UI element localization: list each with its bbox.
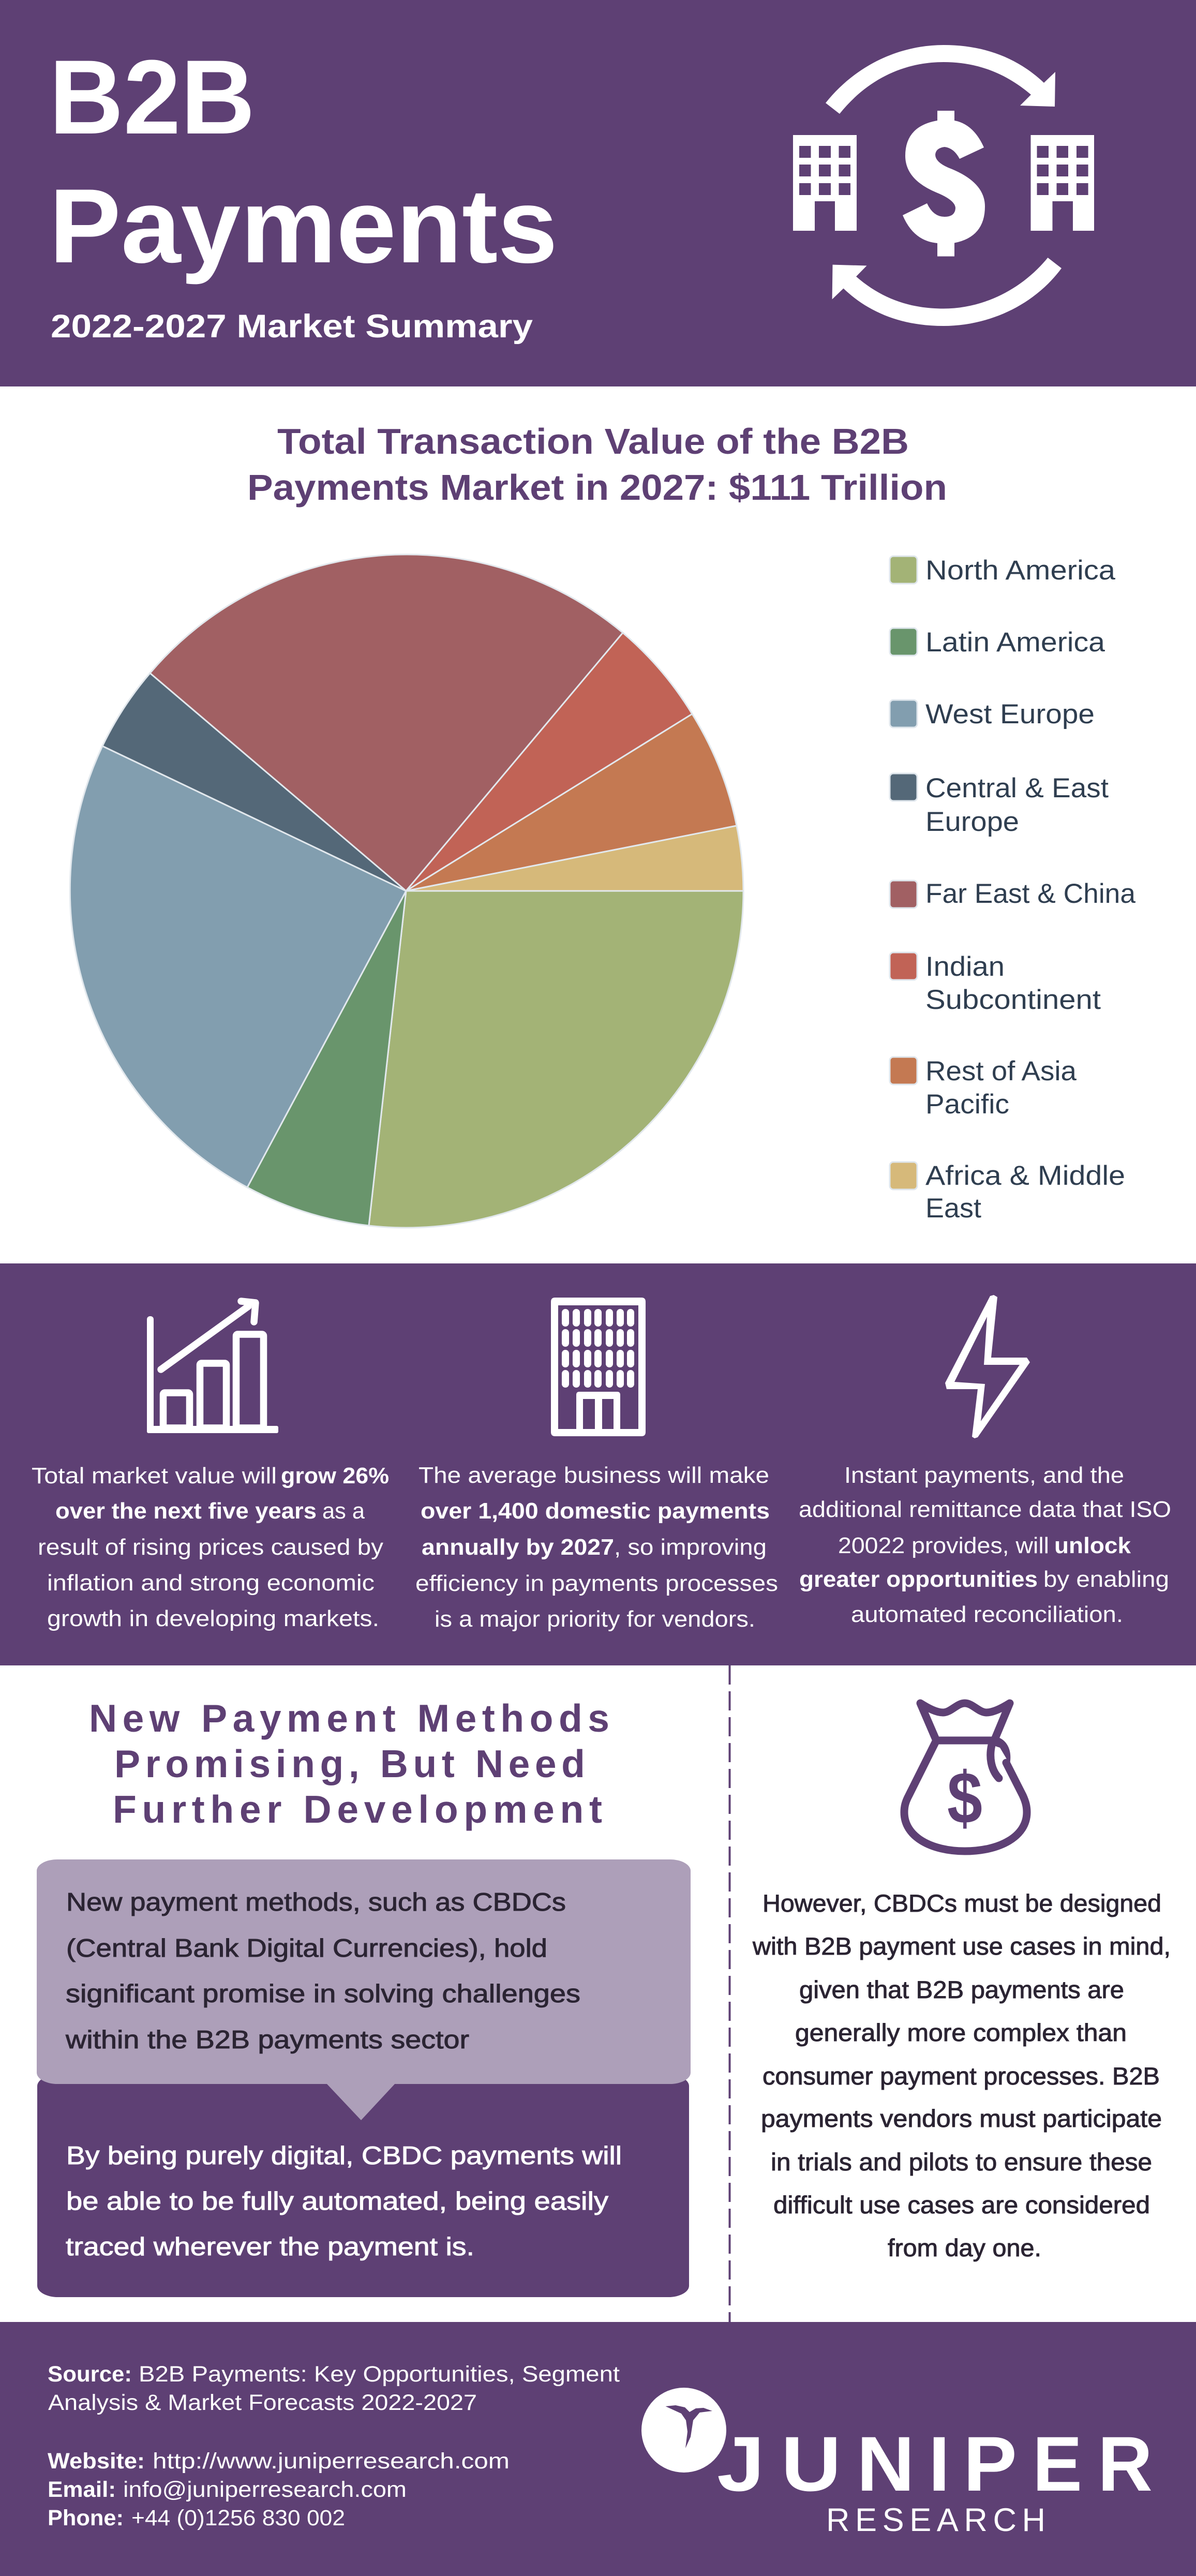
- legend: North America: North America: [925, 555, 1116, 586]
- text: source: B2B Payments: Key Opportunities, Segment: [139, 2362, 620, 2387]
- pie chart: [70, 555, 743, 1228]
- text: CBDC design copy: [752, 1889, 1171, 2261]
- logo wordmark: E: [1033, 2420, 1082, 2507]
- logo mark: [641, 2388, 726, 2473]
- icon: rising bar chart: [147, 1301, 278, 1433]
- legend: Indian Subcontinent: [890, 951, 1101, 1015]
- text: market growth: Total market value will: [32, 1463, 277, 1488]
- text: source: [48, 2362, 620, 2415]
- panel: CBDC design: [752, 1703, 1171, 2261]
- panel: transaction value chart: [70, 421, 1136, 1228]
- section heading: Further Development: [113, 1788, 602, 1831]
- text: market growth: growth in developing markets.: [47, 1606, 379, 1631]
- text: contact details: [48, 2449, 510, 2530]
- title: [49, 38, 558, 285]
- panel: footer: [0, 2322, 1196, 2576]
- logo wordmark: R: [1098, 2420, 1153, 2507]
- text: domestic payments: over 1,400 domestic payments: [421, 1498, 770, 1524]
- legend: Rest of Asia Pacific: [890, 1056, 1077, 1120]
- text: instant payments: [799, 1463, 1171, 1627]
- text: domestic payments: annually by 2027: [422, 1535, 614, 1560]
- legend: Central & East Europe: Central & East: [925, 773, 1109, 803]
- text: light box copy: significant promise in solving challenges: [66, 1980, 580, 2008]
- text: contact details: +44 (0)1256 830 002: [131, 2506, 345, 2530]
- legend: Central & East Europe: Europe: [925, 807, 1019, 837]
- logo wordmark: P: [963, 2420, 1017, 2507]
- text: instant payments: automated reconciliation.: [851, 1602, 1123, 1627]
- text: CBDC design copy: payments vendors must participate: [761, 2105, 1162, 2132]
- text: contact details: Website:: [48, 2449, 145, 2474]
- text: domestic payments: efficiency in payments processes: [415, 1571, 778, 1596]
- text: market growth: grow 26%: [281, 1463, 389, 1488]
- chart heading: Total Transaction Value of the B2B: [277, 421, 909, 461]
- legend: Africa & Middle East: Africa & Middle: [925, 1160, 1125, 1191]
- text: market growth: [32, 1463, 389, 1631]
- text: dark box copy: traced wherever the payment is.: [66, 2233, 474, 2261]
- logo wordmark: J: [717, 2420, 765, 2507]
- logo wordmark: N: [857, 2420, 915, 2507]
- text: instant payments: unlock: [1054, 1533, 1131, 1558]
- legend: Rest of Asia Pacific: Rest of Asia: [925, 1056, 1077, 1086]
- text: instant payments: additional remittance data that ISO: [799, 1497, 1171, 1522]
- panel: header: [0, 0, 1196, 386]
- legend: West Europe: West Europe: [925, 699, 1095, 729]
- legend: Far East & China: Far East & China: [925, 878, 1136, 909]
- text: domestic payments: [415, 1463, 778, 1632]
- text: market growth: as a: [322, 1498, 365, 1524]
- callout: light box with pointer: [37, 1859, 691, 2120]
- section heading: Promising, But Need: [114, 1742, 585, 1785]
- text: dark box copy: be able to be fully automated, being easily: [66, 2187, 609, 2215]
- text: contact details: Email:: [48, 2477, 116, 2502]
- text: CBDC design copy: from day one.: [888, 2234, 1041, 2261]
- callout: dark box: [37, 2075, 689, 2297]
- text: CBDC design copy: with B2B payment use cases in mind,: [752, 1932, 1171, 1960]
- legend: Rest of Asia Pacific: Pacific: [925, 1089, 1009, 1120]
- legend: Indian Subcontinent: Subcontinent: [925, 985, 1101, 1015]
- text: source: Source:: [48, 2362, 132, 2387]
- icon: money bag: $: [947, 1757, 982, 1839]
- text: CBDC design copy: generally more complex than: [795, 2019, 1127, 2046]
- text: contact details: http://www.juniperresearch.com: [153, 2449, 510, 2474]
- text: market growth: result of rising prices caused by: [38, 1535, 383, 1560]
- text: source: Analysis & Market Forecasts 2022-2027: [48, 2390, 477, 2415]
- legend: Africa & Middle East: East: [925, 1193, 981, 1224]
- divider: dashed vertical line: [728, 1665, 730, 2322]
- text: market growth: over the next five years: [55, 1498, 317, 1524]
- text: dark box copy: [66, 2142, 622, 2261]
- title: Payments: [49, 167, 558, 285]
- text: instant payments: 20022 provides, will: [838, 1533, 1049, 1558]
- section heading: [89, 1696, 609, 1831]
- subtitle: 2022-2027 Market Summary: [51, 308, 533, 345]
- text: contact details: Phone:: [48, 2506, 124, 2530]
- icon: office tower: [551, 1298, 646, 1436]
- text: domestic payments: The average business will make: [418, 1463, 769, 1488]
- chart heading: [247, 421, 947, 508]
- icon: payment cycle between buildings: [793, 45, 1094, 326]
- text: light box copy: New payment methods, such as CBDCs: [66, 1888, 566, 1916]
- text: instant payments: Instant payments, and the: [844, 1463, 1124, 1488]
- panel: new payment methods: [37, 1696, 691, 2297]
- logo sub-wordmark: RESEARCH: [826, 2502, 1045, 2538]
- text: domestic payments: is a major priority for vendors.: [435, 1606, 755, 1632]
- legend: Latin America: Latin America: [925, 627, 1105, 658]
- text: instant payments: greater opportunities: [799, 1567, 1038, 1592]
- logo wordmark: I: [929, 2420, 950, 2507]
- icon: money bag: [904, 1703, 1027, 1851]
- text: CBDC design copy: difficult use cases are considered: [773, 2191, 1150, 2218]
- chart heading: Payments Market in 2027: $111 Trillion: [247, 467, 947, 508]
- text: CBDC design copy: given that B2B payments are: [799, 1976, 1124, 2003]
- legend: [890, 555, 1136, 1224]
- text: CBDC design copy: in trials and pilots to ensure these: [771, 2148, 1152, 2176]
- title: B2B: [49, 38, 255, 156]
- icon: lightning bolt: [945, 1295, 1030, 1438]
- text: CBDC design copy: consumer payment processes. B2B: [763, 2062, 1160, 2090]
- section heading: New Payment Methods: [89, 1696, 609, 1740]
- panel: key statistics: [0, 1263, 1196, 1665]
- legend: Central & East Europe: [890, 773, 1109, 837]
- logo wordmark: U: [781, 2420, 841, 2507]
- text: light box copy: [65, 1888, 580, 2054]
- text: light box copy: within the B2B payments sector: [65, 2026, 469, 2054]
- text: CBDC design copy: However, CBDCs must be designed: [763, 1889, 1161, 1917]
- text: dark box copy: By being purely digital, CBDC payments will: [66, 2142, 622, 2170]
- text: domestic payments: , so improving: [614, 1535, 767, 1560]
- logo: Juniper Research: [641, 2388, 1153, 2538]
- legend: Indian Subcontinent: Indian: [925, 951, 1005, 982]
- logo wordmark: [717, 2420, 1153, 2507]
- text: market growth: inflation and strong economic: [47, 1570, 375, 1596]
- text: contact details: info@juniperresearch.com: [123, 2477, 407, 2502]
- legend: Africa & Middle East: [890, 1160, 1125, 1224]
- text: light box copy: (Central Bank Digital Currencies), hold: [66, 1934, 547, 1962]
- text: instant payments: by enabling: [1043, 1567, 1169, 1592]
